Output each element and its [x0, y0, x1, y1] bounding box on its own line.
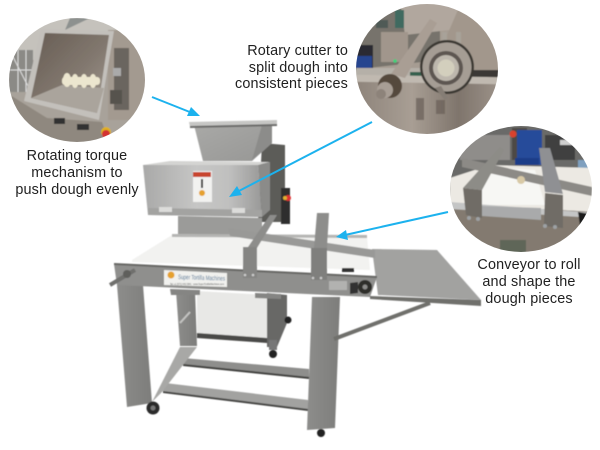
- dark corner and underside: [500, 212, 586, 252]
- right guide upright: [311, 213, 329, 280]
- lower steel plate: [358, 82, 496, 134]
- company sign: Tel: +1 (571) 441 0041 · www.SuperTortillaMachines.com: [170, 282, 224, 286]
- warning label: [193, 171, 212, 202]
- machine photo illustration: [110, 120, 481, 437]
- conveyor belt: [132, 235, 370, 270]
- cutter arm: [391, 19, 437, 78]
- belt rear edge: [172, 234, 367, 238]
- left guide upright: [243, 215, 277, 278]
- caption: rotating torque mechanism: push dough evenly: [15, 182, 139, 198]
- machine side: [108, 30, 148, 120]
- pusher box: [143, 161, 270, 217]
- arrow: to conveyor: [336, 212, 448, 240]
- control box: [281, 188, 291, 224]
- caption: rotary cutter: split dough into: [249, 60, 348, 76]
- background window: [9, 18, 117, 92]
- white conveyor belt: [450, 165, 595, 212]
- left guide beam: [462, 160, 498, 222]
- long guide rail: [228, 228, 375, 258]
- caption: rotating torque mechanism: mechanism to: [31, 165, 123, 181]
- back cabinet and wheels: [170, 289, 292, 358]
- rotary cutter ring: [420, 32, 474, 100]
- casters: [146, 402, 325, 437]
- company sign: Super Tortilla Machines: [178, 274, 226, 283]
- lower cabinet: [10, 95, 111, 145]
- lower frame crossbars: [152, 347, 309, 411]
- support strut: [334, 303, 430, 339]
- photo circle: rotating torque mechanism: [9, 18, 145, 142]
- conveyor side frame: [114, 263, 377, 297]
- hopper interior: [24, 29, 114, 120]
- caption: conveyor: Conveyor to roll: [477, 257, 581, 273]
- dough guide rail: [462, 158, 592, 196]
- plate streaks: [416, 98, 445, 120]
- company sign: [164, 270, 227, 287]
- photo circle: conveyor: [450, 126, 592, 252]
- left leg: [117, 285, 152, 407]
- arrow: to rotary cutter: [229, 122, 372, 197]
- dough ball: [517, 176, 525, 184]
- hopper: [189, 120, 277, 161]
- shaft knob: [376, 74, 402, 99]
- photo circle: rotary cutter: [356, 4, 498, 134]
- lower housing: [178, 216, 262, 236]
- right leg: [307, 297, 340, 430]
- arrow: to hopper: [152, 97, 200, 116]
- background equipment: [460, 128, 588, 168]
- exit table: [370, 249, 481, 306]
- adjustment knob: [110, 270, 135, 285]
- right guide beam: [539, 148, 563, 229]
- caption: rotating torque mechanism: Rotating torque: [27, 148, 127, 164]
- caption: rotary cutter: Rotary cutter to: [247, 43, 348, 59]
- caption: rotary cutter: consistent pieces: [235, 76, 348, 92]
- caption: conveyor: dough pieces: [485, 291, 573, 307]
- dark rear housing: [258, 143, 285, 222]
- caption: conveyor: and shape the: [482, 274, 576, 290]
- auger screw: [62, 73, 100, 88]
- side frame: [452, 202, 587, 252]
- background equipment: [356, 4, 498, 78]
- drive mechanism: [329, 268, 372, 294]
